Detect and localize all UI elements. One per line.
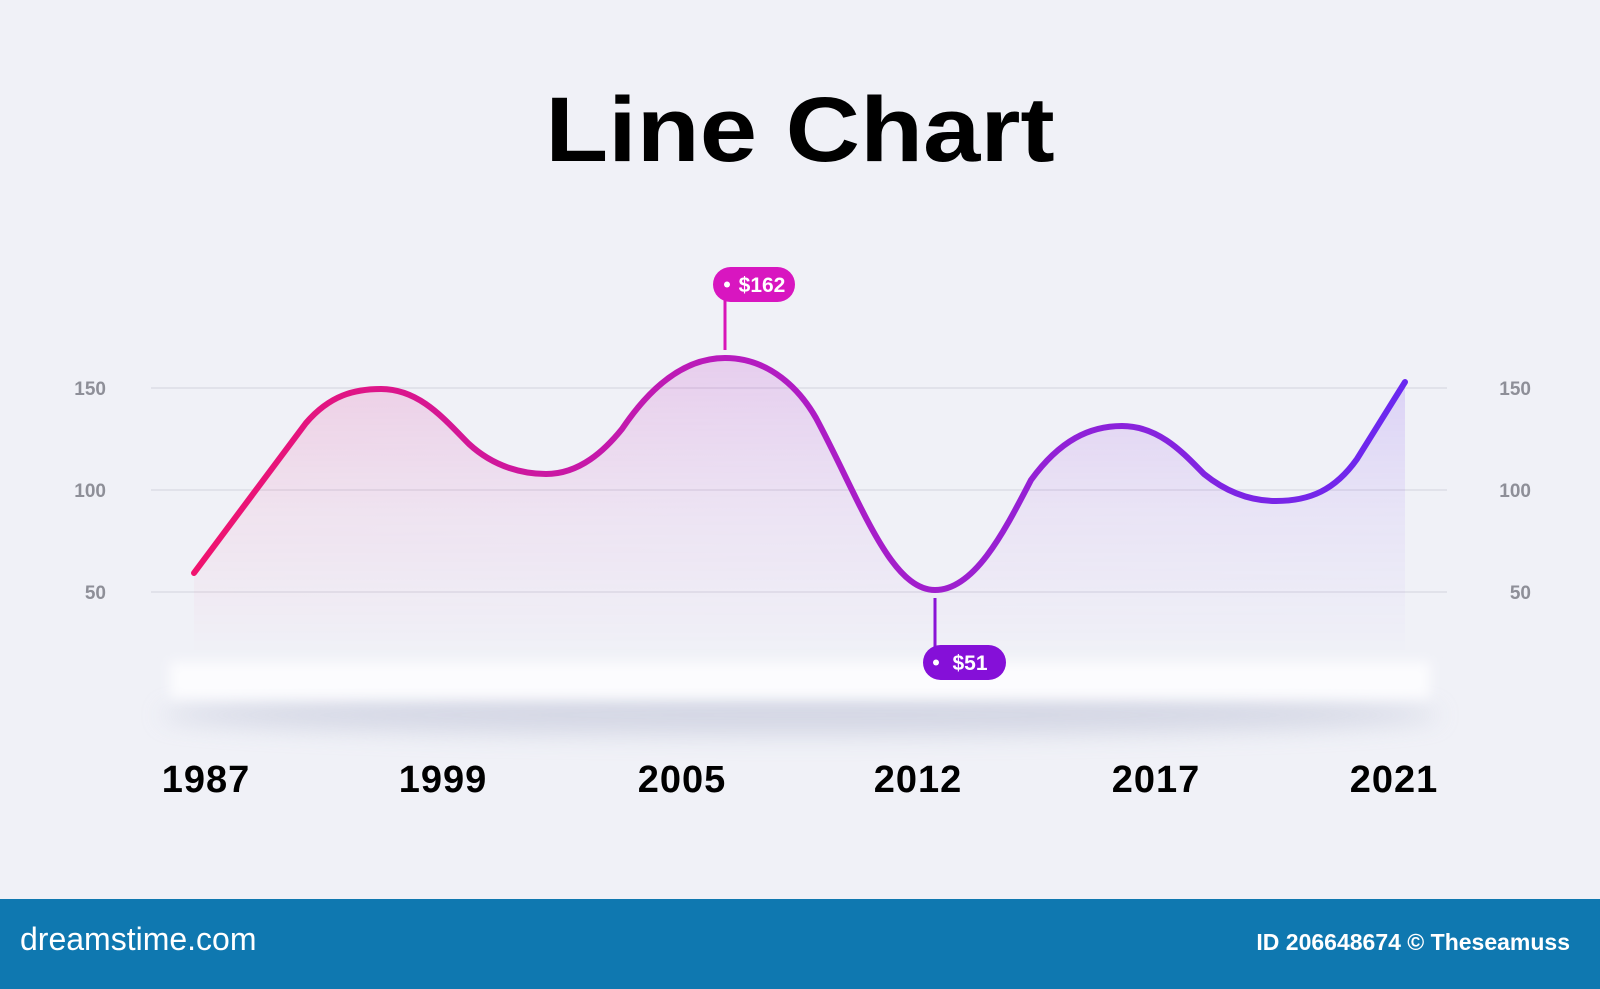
- callout: $162: $162: [739, 274, 785, 297]
- x axis years: 2005: [638, 759, 726, 801]
- x axis years: [162, 759, 1438, 801]
- callout: $51: $51: [952, 652, 988, 675]
- callout: $162: [713, 267, 795, 350]
- x axis years: 2017: [1112, 759, 1200, 801]
- footer credit: ID 206648674 © Theseamuss: [1256, 929, 1570, 955]
- footer logo: dreamstime.com: [20, 921, 256, 957]
- y axis labels right: 100: [1499, 481, 1531, 502]
- y axis labels right: 50: [1510, 583, 1531, 604]
- y axis labels left: 150: [74, 379, 106, 400]
- grid lines: [151, 388, 1447, 592]
- y axis labels left: 50: [85, 583, 106, 604]
- platform: [170, 662, 1430, 698]
- y axis labels right: 150: [1499, 379, 1531, 400]
- y axis labels left: [74, 379, 106, 604]
- x axis years: 1987: [162, 759, 250, 801]
- x axis years: 2012: [874, 759, 962, 801]
- line chart: [75, 267, 1530, 792]
- footer bar: [0, 899, 1600, 989]
- x axis years: 2021: [1350, 759, 1438, 801]
- y axis labels left: 100: [74, 481, 106, 502]
- callout: $51: [923, 598, 1006, 680]
- title: Line Chart: [545, 79, 1055, 181]
- x axis years: 1999: [399, 759, 487, 801]
- curve line: [194, 358, 1405, 590]
- y axis labels right: [1499, 379, 1531, 604]
- area fill: [200, 361, 1405, 572]
- platform shadow: [160, 695, 1440, 735]
